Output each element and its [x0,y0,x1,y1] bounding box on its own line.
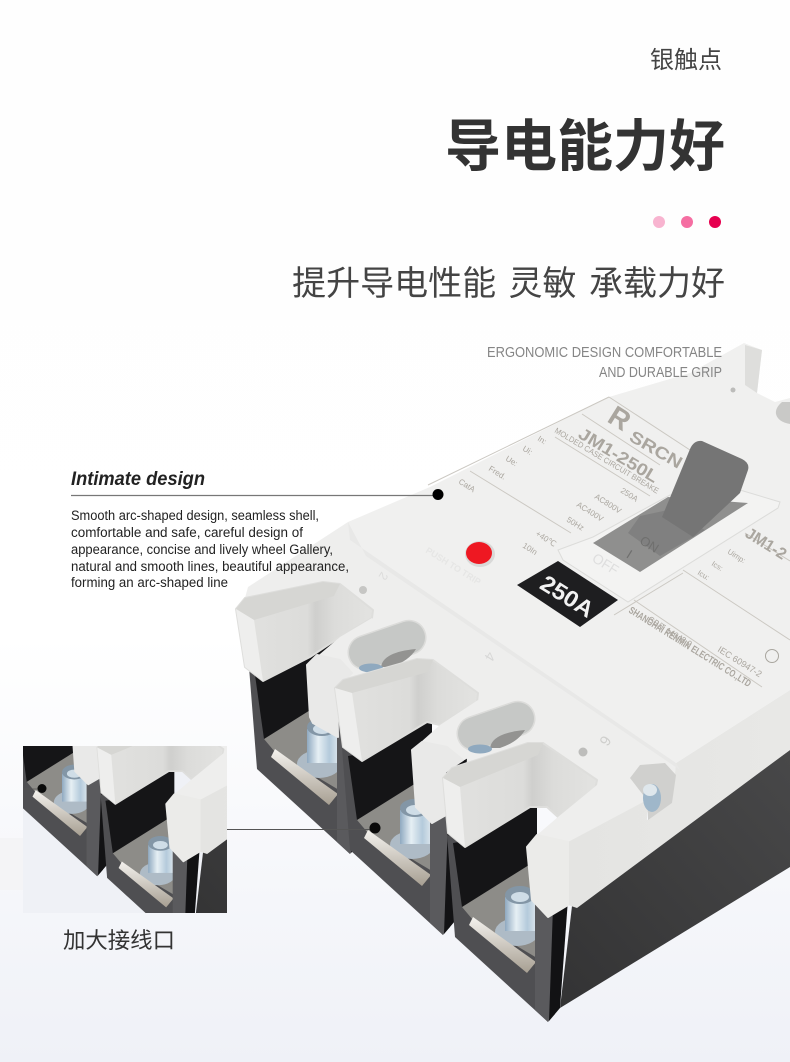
English slogan: ERGONOMIC DESIGN COMFORTABLE [487,345,722,361]
terminal numbers and holes: 4 [481,649,499,664]
callout paragraph: Smooth arc-shaped design, seamless shell, [71,508,319,523]
printed brand and model text: +40℃ [534,529,558,549]
printed brand and model text: In: [536,434,548,446]
printed brand and model text: 10In [521,541,539,557]
250A rating label: 250A [536,570,599,623]
printed brand and model text: Fred. [487,464,508,482]
callout paragraph: comfortable and safe, careful design of [71,525,303,540]
callout paragraph: appearance, concise and lively wheel Gallery, [71,542,333,557]
printed brand and model text: PUSH TO TRIP [424,545,483,587]
callout heading: Intimate design: Intimate design [71,469,205,490]
inset close-up of terminals [23,746,227,913]
terminal numbers and holes: 2 [376,570,391,583]
English slogan [487,345,722,381]
printed brand and model text: CatA [457,477,477,494]
tagline: 提升导电性能 灵敏 承载力好 [292,265,725,303]
callout leader line and dot [71,489,444,500]
printed brand and model text: Ics: [710,559,725,573]
inset caption: 加大接线口 [63,928,175,953]
printed brand and model text: JM1-250L [575,424,662,487]
printed brand and model text: IEC 60947-2 [716,644,764,679]
printed brand and model text: R [603,400,636,437]
printed brand and model text: Ui: [521,444,534,457]
printed brand and model text [424,400,789,690]
printed brand and model text: JM1-2 [742,525,789,563]
circuit breaker product drawing [236,343,790,1022]
main heading: 导电能力好 [445,115,725,178]
printed brand and model text: Icu: [696,568,711,582]
printed brand and model text: Ue: [504,454,519,468]
printed brand and model text: 250A [619,486,640,504]
callout paragraph: natural and smooth lines, beautiful appearance, [71,559,349,574]
printed brand and model text: AC800V [593,492,624,516]
three pink dots [653,216,721,228]
callout paragraph: forming an arc-shaped line [71,575,228,590]
red indicator button [465,541,495,567]
switch plate and handle: I [624,547,635,562]
printed brand and model text: SHANGHAI RENMIN ELECTRIC CO.,LTD [626,605,753,690]
wiring terminal leader line and dot [227,822,380,834]
callout paragraph [71,508,349,590]
switch plate and handle [558,441,780,602]
printed brand and model text: 50Hz [565,515,586,533]
printed brand and model text: SRCN [626,427,686,472]
switch plate and handle: ON [637,533,662,556]
terminal numbers and holes: 6 [595,732,614,748]
printed brand and model text: GB/T 14048.2 [646,614,694,649]
250A rating label [517,561,618,627]
terminals and dark housing [236,522,790,1022]
printed brand and model text: Uimp: [726,547,747,565]
switch plate and handle: OFF [590,550,622,578]
terminal numbers and holes [359,570,778,756]
subtitle: silver contact: 银触点 [650,47,722,74]
printed brand and model text: AC400V [575,500,606,524]
printed brand and model text: MOLDED CASE CIRCUIT BREAKE [553,426,660,496]
top plateau of the shell [348,343,790,770]
English slogan: AND DURABLE GRIP [599,365,722,381]
